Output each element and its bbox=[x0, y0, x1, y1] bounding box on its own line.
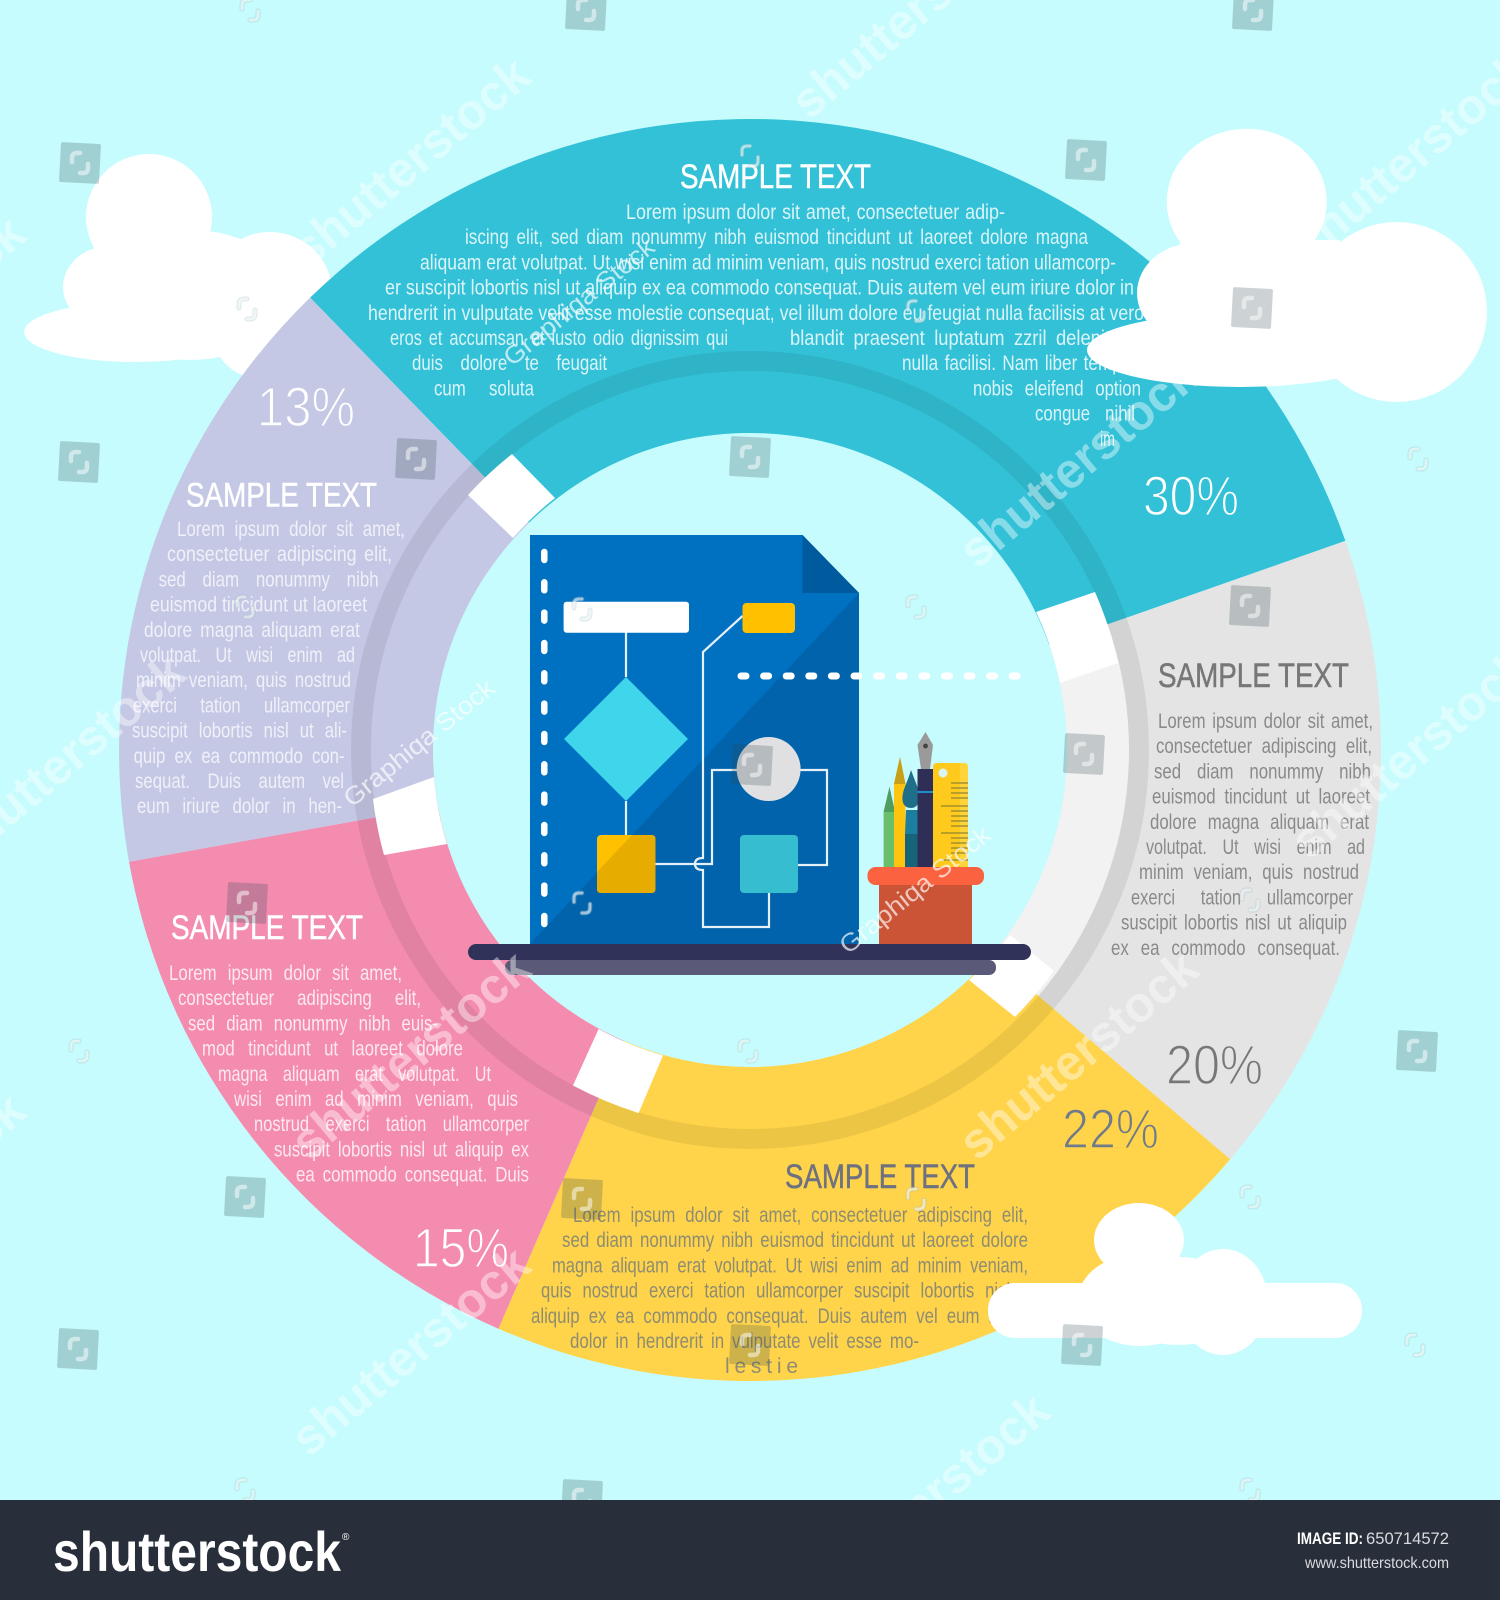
teal body text: cum soluta bbox=[434, 377, 534, 400]
panel: lavender segment 13% bbox=[119, 298, 529, 862]
teal body text: Lorem ipsum dolor sit amet, consectetuer adip- bbox=[626, 201, 1005, 224]
teal body text: eros et accumsan et iusto odio dignissim qui bbox=[390, 327, 728, 350]
gray body text: exerci tation ullamcorper bbox=[1131, 886, 1353, 909]
yellow body text: lestie bbox=[725, 1355, 798, 1378]
stock watermarks: Graphiqa Stock bbox=[498, 233, 661, 372]
teal heading: SAMPLE TEXT bbox=[680, 158, 871, 196]
lavender body text: exerci tation ullamcorper bbox=[133, 694, 350, 717]
lavender body text: sed diam nonummy nibh bbox=[159, 568, 379, 591]
teal body text bbox=[368, 201, 1144, 451]
green pencil bbox=[884, 787, 895, 867]
lavender body text: quip ex ea commodo con- bbox=[134, 745, 345, 768]
paint brush bbox=[905, 834, 919, 867]
teal wedge bbox=[310, 119, 1345, 645]
pink body text: mod tincidunt ut laoreet dolore bbox=[202, 1038, 463, 1061]
teal body text: hendrerit in vulputate velit esse molestie consequat, vel illum dolore eu feugiat nulla facilisis at vero bbox=[368, 302, 1144, 325]
teal body text: aliquam erat volutpat. Ut wisi enim ad minim veniam, quis nostrud exerci tation ullamcorp- bbox=[420, 251, 1116, 274]
footer logo: shutterstock bbox=[53, 1520, 342, 1583]
lavender body text: dolore magna aliquam erat bbox=[144, 619, 360, 642]
pink body text: consectetuer adipiscing elit, bbox=[178, 987, 421, 1010]
flowchart white box bbox=[564, 602, 689, 633]
yellow heading: SAMPLE TEXT bbox=[785, 1158, 975, 1196]
flowchart circle bbox=[737, 737, 801, 801]
flowchart connector lines bbox=[626, 616, 827, 927]
panel: gray segment 20% bbox=[991, 541, 1381, 1159]
footer image id label: IMAGE ID: bbox=[1297, 1529, 1363, 1548]
panel: pink segment 15% bbox=[129, 806, 624, 1329]
gray body text: dolore magna aliquam erat bbox=[1150, 811, 1369, 834]
pink heading: SAMPLE TEXT bbox=[171, 909, 363, 947]
yellow pencil bbox=[894, 757, 906, 867]
teal body text: nulla facilisi. Nam liber tempor bbox=[902, 352, 1137, 375]
stock watermarks: Graphiqa Stock bbox=[338, 674, 501, 813]
pink body text: wisi enim ad minim veniam, quis bbox=[233, 1088, 518, 1111]
document shadow bbox=[530, 593, 859, 944]
yellow body text: Lorem ipsum dolor sit amet, consectetuer adipiscing elit, bbox=[573, 1204, 1028, 1227]
lavender percentage: 13% bbox=[257, 375, 355, 438]
stock watermarks: shutterstock bbox=[948, 939, 1209, 1170]
lavender body text: consectetuer adipiscing elit, bbox=[167, 543, 392, 566]
white connector tabs bbox=[373, 454, 1118, 1113]
panel: yellow segment 22% bbox=[498, 956, 1230, 1381]
stock watermarks: Graphiqa Stock bbox=[834, 821, 997, 960]
pencil cup body bbox=[879, 885, 972, 945]
cloud: top right bbox=[1087, 129, 1487, 402]
flowchart amber square bbox=[597, 835, 656, 893]
flowchart amber label bbox=[742, 603, 795, 633]
document fold bbox=[802, 535, 859, 593]
lavender body text: sequat. Duis autem vel bbox=[135, 770, 344, 793]
teal body text: blandit praesent luptatum zzril delenit bbox=[790, 327, 1110, 350]
pink percentage: 15% bbox=[413, 1216, 509, 1279]
lavender wedge bbox=[119, 298, 529, 862]
stock watermarks: shutterstock bbox=[280, 1235, 541, 1466]
gray body text: consectetuer adipiscing elit, bbox=[1156, 735, 1372, 758]
gray body text: Lorem ipsum dolor sit amet, bbox=[1158, 710, 1373, 733]
gray body text: ex ea commodo consequat. bbox=[1111, 937, 1340, 960]
lavender body text: suscipit lobortis nisl ut ali- bbox=[132, 720, 347, 743]
yellow body text: magna aliquam erat volutpat. Ut wisi enim ad minim veniam, bbox=[552, 1254, 1028, 1277]
lavender body text: minim veniam, quis nostrud bbox=[136, 669, 351, 692]
flowchart teal square bbox=[740, 835, 798, 893]
footer registered mark: ® bbox=[342, 1532, 350, 1543]
gray body text: euismod tincidunt ut laoreet bbox=[1152, 786, 1370, 809]
teal percentage: 30% bbox=[1143, 464, 1239, 527]
teal body text: er suscipit lobortis nisl ut aliquip ex ea commodo consequat. Duis autem vel eum iriure dolor in bbox=[385, 277, 1134, 300]
pink body text bbox=[169, 962, 529, 1187]
stock watermarks: shutterstock bbox=[280, 939, 541, 1170]
lavender body text bbox=[132, 518, 405, 818]
yellow body text bbox=[531, 1204, 1035, 1378]
gray heading: SAMPLE TEXT bbox=[1158, 657, 1349, 695]
dotted leader line bbox=[741, 672, 1021, 680]
gray inner band bbox=[991, 624, 1129, 996]
fountain pen bbox=[918, 769, 933, 867]
pencil cup rim bbox=[868, 867, 984, 885]
gray body text bbox=[1111, 710, 1373, 960]
stock watermarks: shutterstock bbox=[280, 46, 541, 277]
shelf top bar bbox=[468, 944, 1031, 960]
teal body text: nobis eleifend option bbox=[973, 377, 1141, 400]
yellow percentage: 22% bbox=[1062, 1097, 1159, 1160]
ruler bbox=[933, 763, 968, 867]
lavender heading: SAMPLE TEXT bbox=[186, 476, 377, 514]
document sheet bbox=[530, 535, 859, 944]
yellow body text: dolor in hendrerit in vulputate velit esse mo- bbox=[570, 1330, 919, 1353]
pink body text: ea commodo consequat. Duis bbox=[296, 1164, 529, 1187]
flowchart diamond bbox=[564, 677, 688, 801]
gray body text: volutpat. Ut wisi enim ad bbox=[1146, 836, 1365, 859]
pink body text: sed diam nonummy nibh euis- bbox=[188, 1012, 438, 1035]
binding holes bbox=[541, 552, 548, 924]
gray body text: sed diam nonummy nibh bbox=[1154, 760, 1371, 783]
gray percentage: 20% bbox=[1166, 1033, 1263, 1096]
yellow body text: quis nostrud exerci tation ullamcorper suscipit lobortis nisl ut bbox=[541, 1280, 1035, 1303]
gray wedge bbox=[991, 541, 1381, 1159]
teal body text: congue nihil bbox=[1035, 403, 1135, 426]
amber square shadow bbox=[597, 835, 656, 893]
lavender body text: euismod tincidunt ut laoreet bbox=[150, 594, 367, 617]
yellow body text: aliquip ex ea commodo consequat. Duis autem vel eum iriure bbox=[531, 1305, 1026, 1328]
illustration: flowchart document on shelf bbox=[468, 535, 1031, 975]
lavender body text: eum iriure dolor in hen- bbox=[137, 795, 342, 818]
footer url: www.shutterstock.com bbox=[1304, 1555, 1449, 1572]
pink wedge bbox=[129, 806, 624, 1329]
pink body text: nostrud exerci tation ullamcorper bbox=[254, 1113, 529, 1136]
shelf lower bar bbox=[505, 960, 996, 975]
cloud: bottom right bbox=[988, 1203, 1362, 1355]
pencil cup contents bbox=[884, 732, 968, 867]
gray body text: suscipit lobortis nisl ut aliquip bbox=[1121, 912, 1347, 935]
cloud: top left bbox=[24, 154, 335, 382]
teal body text: im bbox=[1100, 428, 1115, 451]
footer image id number: 650714572 bbox=[1366, 1529, 1449, 1548]
pink body text: Lorem ipsum dolor sit amet, bbox=[169, 962, 402, 985]
teal body text: duis dolore te feugait bbox=[412, 352, 607, 375]
pink body text: suscipit lobortis nisl ut aliquip ex bbox=[274, 1138, 529, 1161]
pink body text: magna aliquam erat volutpat. Ut bbox=[218, 1063, 491, 1086]
yellow body text: sed diam nonummy nibh euismod tincidunt ut laoreet dolore bbox=[562, 1229, 1028, 1252]
lavender body text: Lorem ipsum dolor sit amet, bbox=[177, 518, 405, 541]
stock watermarks: shutterstock bbox=[948, 347, 1209, 578]
panel: teal segment 30% bbox=[310, 119, 1345, 645]
gray body text: minim veniam, quis nostrud bbox=[1139, 861, 1359, 884]
teal body text: iscing elit, sed diam nonummy nibh euismod tincidunt ut laoreet dolore magna bbox=[465, 226, 1088, 249]
lavender body text: volutpat. Ut wisi enim ad bbox=[140, 644, 355, 667]
footer bar bbox=[0, 1500, 1500, 1600]
yellow wedge bbox=[498, 956, 1230, 1381]
